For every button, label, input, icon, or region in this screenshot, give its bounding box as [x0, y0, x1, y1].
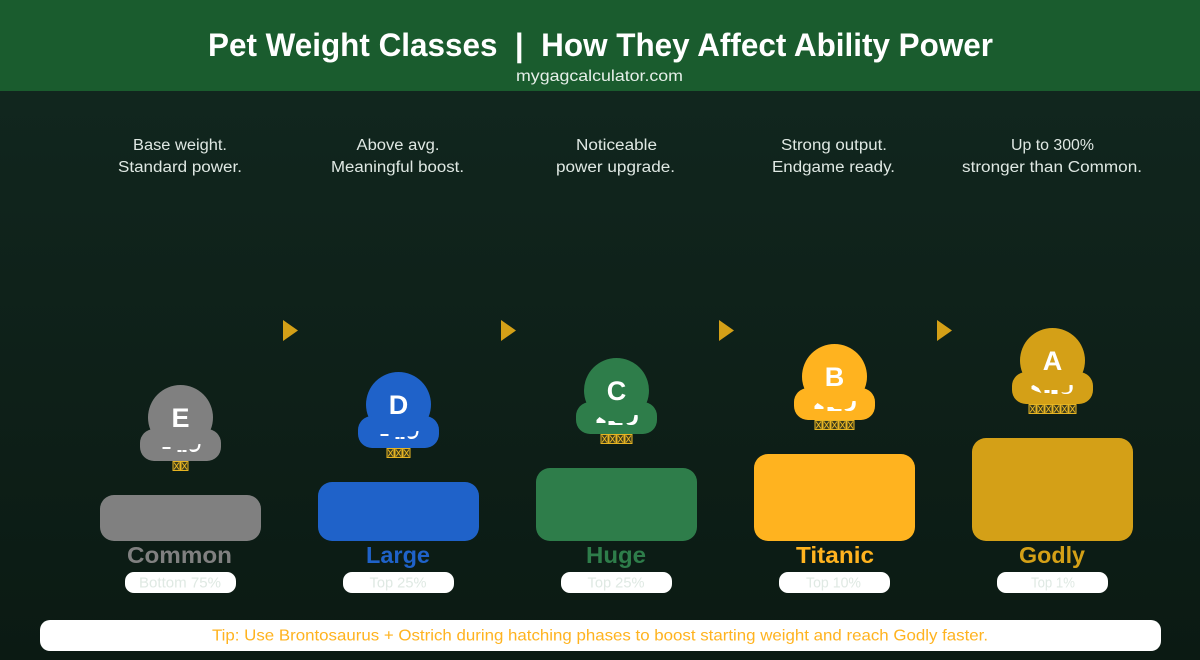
label: Godly: Godly — [1019, 542, 1085, 568]
badge: B: B — [825, 362, 844, 392]
badge: D: D — [389, 390, 408, 420]
label: Common: Common — [127, 542, 232, 568]
percentile pill: Common — [125, 572, 236, 593]
percentile pill: Common: Bottom 75% — [139, 576, 221, 592]
arrow 4 — [937, 320, 952, 341]
column: Common — [100, 137, 261, 593]
bar: Huge — [536, 468, 697, 541]
column: Large — [318, 137, 479, 593]
percentile pill: Huge — [561, 572, 672, 593]
percentile pill: Titanic: Top 10% — [806, 576, 861, 592]
percentile pill: Godly — [997, 572, 1108, 593]
badge: C: C — [607, 376, 626, 406]
label: Titanic: Titanic — [796, 542, 874, 568]
label: Huge: Huge — [586, 542, 646, 568]
subtitle: mygagcalculator.com — [516, 68, 683, 85]
column: Godly — [962, 137, 1142, 593]
description: Large: Above avg. — [356, 137, 440, 154]
description: Common: Base weight. — [133, 137, 227, 154]
arrow 3 — [719, 320, 734, 341]
header band — [0, 0, 1200, 91]
description: Huge: Noticeable — [576, 137, 657, 154]
column: Titanic — [754, 137, 915, 593]
column: Huge — [536, 137, 697, 593]
description line 2: Godly: stronger than Common. — [962, 159, 1142, 176]
arrow 1 — [283, 320, 298, 341]
percentile pill: Huge: Top 25% — [588, 576, 645, 592]
percentile pill: Titanic — [779, 572, 890, 593]
badge: D — [358, 372, 439, 458]
percentile pill: Large — [343, 572, 454, 593]
tip bar — [40, 620, 1161, 651]
badge: E: E — [171, 403, 190, 433]
bar: Titanic — [754, 454, 915, 541]
bar: Godly — [972, 438, 1133, 541]
title: Pet Weight Classes | How They Affect Ability Power — [208, 27, 993, 63]
badge: A — [1012, 328, 1093, 414]
description line 2: Titanic: Endgame ready. — [772, 159, 895, 176]
bar: Large — [318, 482, 479, 541]
label: Large: Large — [366, 542, 430, 568]
badge: A: A — [1043, 346, 1062, 376]
percentile pill: Godly: Top 1% — [1031, 576, 1075, 592]
description line 2: Large: Meaningful boost. — [331, 159, 464, 176]
description line 2: Huge: power upgrade. — [556, 159, 675, 176]
badge: C — [576, 358, 657, 444]
tip bar: Tip: Use Brontosaurus + Ostrich during hatching phases to boost starting weight and reach Godly faster. — [212, 628, 988, 644]
badge: B — [794, 344, 875, 430]
description: Godly: Up to 300% — [1011, 137, 1094, 154]
percentile pill: Large: Top 25% — [370, 576, 427, 592]
bar: Common — [100, 495, 261, 541]
arrow 2 — [501, 320, 516, 341]
description line 2: Common: Standard power. — [118, 159, 242, 176]
description: Titanic: Strong output. — [781, 137, 887, 154]
badge: E — [140, 385, 221, 470]
